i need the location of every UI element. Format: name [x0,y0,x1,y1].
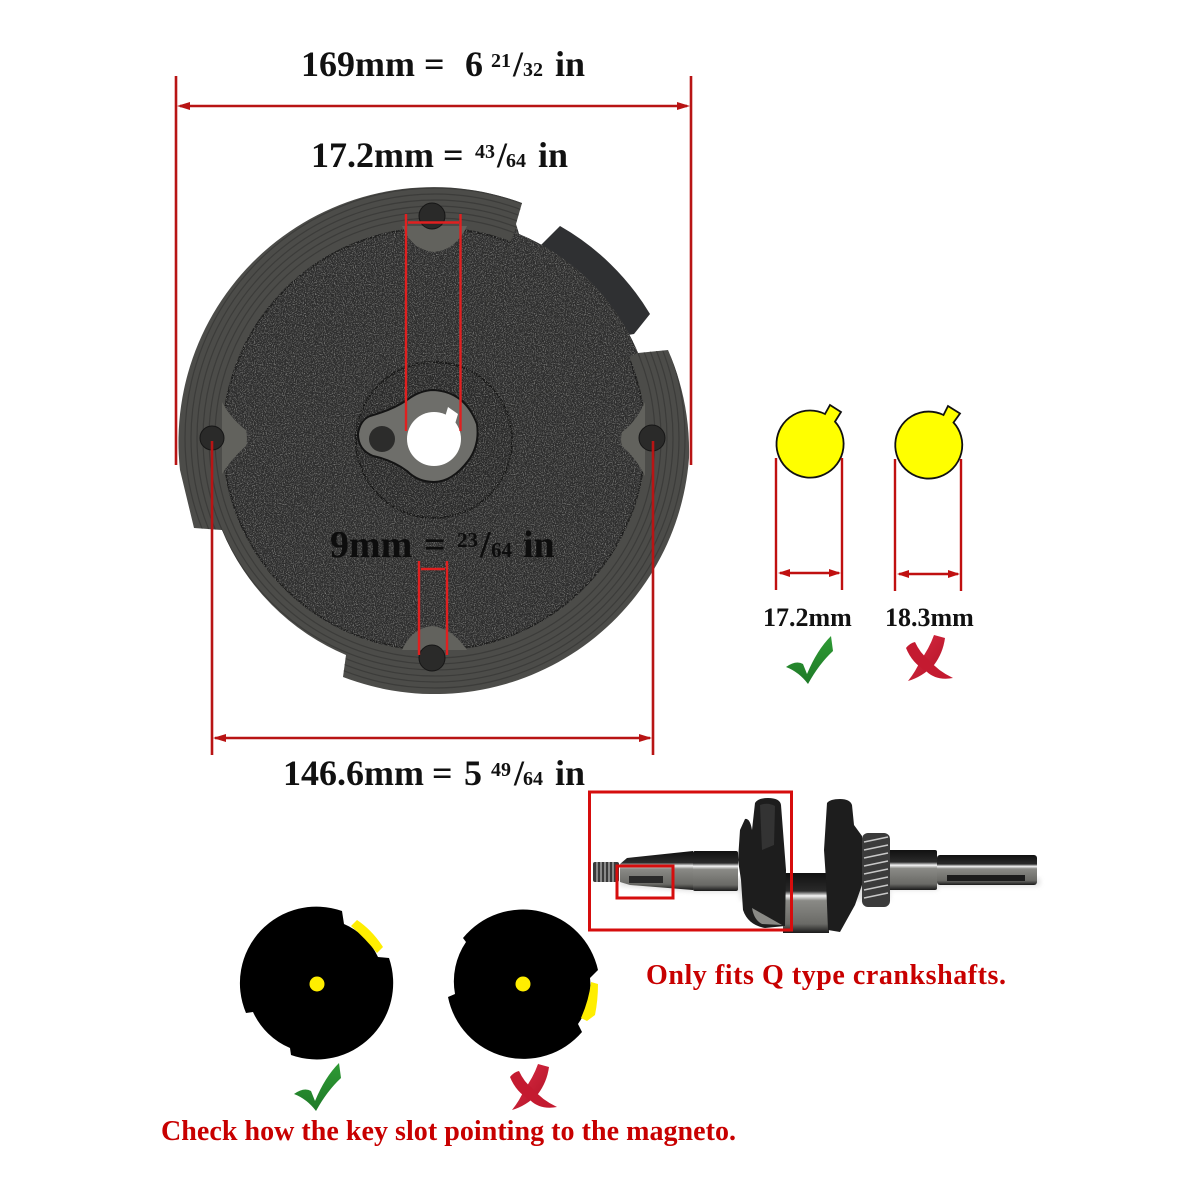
key diagram: wrong 18.3mm [885,406,974,681]
label: 9mm: 9mm [330,524,412,566]
magnet block [540,226,650,335]
label: 169mm: / [512,44,524,84]
recessed textured face [223,228,645,650]
hub boss [358,390,478,482]
crank journal [783,873,829,933]
key diagram: correct 17.2mm: 17.2mm [763,603,852,632]
label: 9mm: in [523,524,555,566]
label: 169mm: 32 [523,59,543,81]
label: 17.2mm: in [538,135,568,175]
boss bolt hole [369,426,395,452]
label: 17.2mm: / [496,135,508,175]
label: 169mm: 21 [491,50,511,72]
label: 146.6mm: = [432,753,453,793]
mounting lugs [222,226,645,650]
highlighted region box [590,792,792,930]
label: 17.2mm: 17.2mm [311,135,434,175]
lug holes [200,203,665,671]
label: 17.2mm: 64 [506,150,526,172]
label: 146.6mm: / [513,753,525,793]
label: 146.6mm: 146.6mm [283,753,424,793]
keyed shaft bore [407,407,461,466]
icon: red cross [906,635,953,681]
label: 17.2mm: 43 [475,141,495,163]
caption: crankshafts: Only fits Q type crankshafts. [646,960,1006,991]
hub ring [356,362,512,518]
dimension: key bore 17.2mm [311,135,568,431]
icon: green check [786,636,833,684]
label: 9mm: 64 [491,538,512,562]
key diagram: correct 17.2mm [763,405,852,684]
label: 169mm: in [555,44,585,84]
dimension: overall diameter [176,44,691,465]
icon: green check [294,1063,341,1111]
diagram: correct key orientation [240,907,393,1111]
keyway highlight box [617,866,673,898]
label: 169mm: 169mm [301,44,415,84]
label: 146.6mm: 5 [464,753,482,793]
label: 17.2mm: = [443,135,464,175]
label: 9mm: = [424,524,446,566]
tapered shaft [620,851,693,890]
label: 9mm: 23 [457,528,478,552]
first crank web [738,798,786,928]
diagram: wrong key orientation [448,910,598,1110]
crankshaft photo [590,792,1040,933]
label: 146.6mm: 49 [491,759,511,781]
dimension: lug width 9mm [330,524,555,655]
label: 9mm: / [479,524,491,566]
label: 169mm: 6 [465,44,483,84]
key diagram: wrong 18.3mm: 18.3mm [885,603,974,632]
threaded end [593,862,619,882]
flywheel [178,187,689,694]
label: 146.6mm: 64 [523,768,543,790]
label: 169mm: = [424,44,445,84]
caption: key slot: Check how the key slot pointing to the magneto. [161,1116,736,1147]
dimension: lug spacing 146.6mm [212,441,653,793]
gear [862,833,890,907]
flywheel body rim [178,187,689,694]
icon: red cross [510,1064,557,1110]
output shaft [888,850,937,890]
label: 146.6mm: in [555,753,585,793]
second crank web [824,799,862,932]
